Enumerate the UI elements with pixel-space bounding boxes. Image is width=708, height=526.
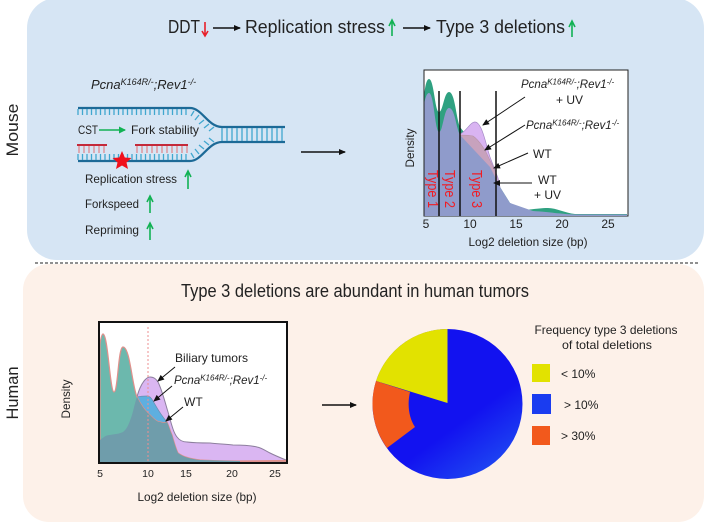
panel: human — [23, 264, 704, 522]
chart annotations: Pcna — [174, 375, 200, 387]
curve: biliary tumors — [100, 377, 286, 462]
chart annotations: WT — [184, 395, 203, 409]
list: fork effects: Repriming — [85, 223, 139, 237]
chart annotations: WT — [538, 173, 557, 187]
heading: mouse pathway — [168, 17, 575, 37]
arrow: human chart to pie — [322, 404, 356, 406]
icon: red star — [112, 151, 132, 169]
chart annotations: K164R/- — [552, 118, 582, 128]
label: CST to fork stability — [78, 123, 199, 137]
heading: mouse pathway: DDT — [168, 17, 200, 37]
chart annotations: ;Rev1 — [230, 375, 260, 387]
chart annotations: WT — [533, 147, 552, 161]
genotype label: fork: K164R/- — [121, 77, 154, 87]
label: CST to fork stability: CST — [78, 123, 99, 137]
type labels: Type 1 — [424, 170, 441, 208]
legend — [532, 323, 678, 445]
label: CST to fork stability: Fork stability — [131, 123, 199, 137]
axis labels — [59, 380, 281, 504]
curve: Pcna — [137, 396, 167, 426]
chart: human density — [59, 322, 287, 504]
chart annotations: -/- — [260, 374, 268, 382]
heading: mouse pathway: Replication stress — [245, 17, 385, 37]
type labels — [424, 170, 485, 208]
chart annotations: Biliary tumors — [175, 351, 248, 365]
chart annotations: + UV — [556, 93, 583, 107]
axis labels: 25 — [601, 217, 615, 231]
axis labels: Log2 deletion size (bp) — [468, 235, 588, 249]
axis labels: Density — [59, 380, 73, 418]
label: Mouse: Mouse — [3, 103, 22, 157]
axis labels: 10 — [463, 217, 477, 231]
axis labels: 10 — [142, 468, 154, 480]
axis labels: 15 — [180, 468, 192, 480]
axis labels: 20 — [226, 468, 238, 480]
chart annotations: K164R/- — [547, 78, 577, 86]
diagram: replication fork — [77, 108, 285, 169]
chart annotations: Pcna — [526, 120, 552, 132]
chart annotations — [154, 351, 268, 421]
legend: > 10% — [564, 398, 599, 412]
label: Human: Human — [3, 366, 22, 420]
chart annotations: -/- — [612, 118, 620, 128]
chart annotations — [483, 78, 620, 202]
type labels: Type 2 — [441, 170, 458, 208]
legend: > 30% — [561, 429, 596, 443]
heading: human: Type 3 deletions are abundant in human tumors — [181, 281, 529, 301]
axis labels — [403, 128, 615, 249]
axis labels: 15 — [509, 217, 523, 231]
axis labels: 20 — [555, 217, 569, 231]
list: fork effects — [85, 171, 191, 240]
legend: of total deletions — [562, 338, 652, 352]
list: fork effects: Forkspeed — [85, 197, 139, 211]
axis labels: 25 — [269, 468, 281, 480]
heading: mouse pathway: Type 3 deletions — [436, 17, 565, 37]
chart annotations: -/- — [607, 78, 615, 86]
chart annotations: K164R/- — [200, 374, 230, 382]
panel: mouse — [27, 0, 704, 260]
overlap region — [100, 397, 240, 462]
red nascent strands — [77, 145, 188, 153]
genotype label: fork: Pcna — [91, 77, 121, 92]
chart annotations: ;Rev1 — [582, 120, 612, 132]
legend: < 10% — [561, 367, 596, 381]
curve: WT — [100, 334, 286, 462]
chart annotations: Pcna — [521, 79, 547, 91]
chart: pie — [372, 329, 522, 479]
chart: mouse density — [403, 70, 628, 249]
legend: Frequency type 3 deletions — [534, 323, 678, 337]
type labels: Type 3 — [468, 170, 485, 208]
axis labels: 5 — [423, 217, 430, 231]
axis labels: Log2 deletion size (bp) — [138, 490, 256, 504]
chart annotations: ;Rev1 — [577, 79, 607, 91]
divider: dashed separator — [35, 262, 700, 264]
list: fork effects: Replication stress — [85, 172, 177, 186]
axis labels: Density — [403, 128, 417, 168]
arrow: fork to mouse chart — [301, 151, 345, 153]
genotype label: fork: -/- — [188, 77, 196, 87]
genotype label: fork: ;Rev1 — [154, 77, 188, 92]
chart annotations: + UV — [534, 188, 561, 202]
axis labels: 5 — [97, 468, 103, 480]
